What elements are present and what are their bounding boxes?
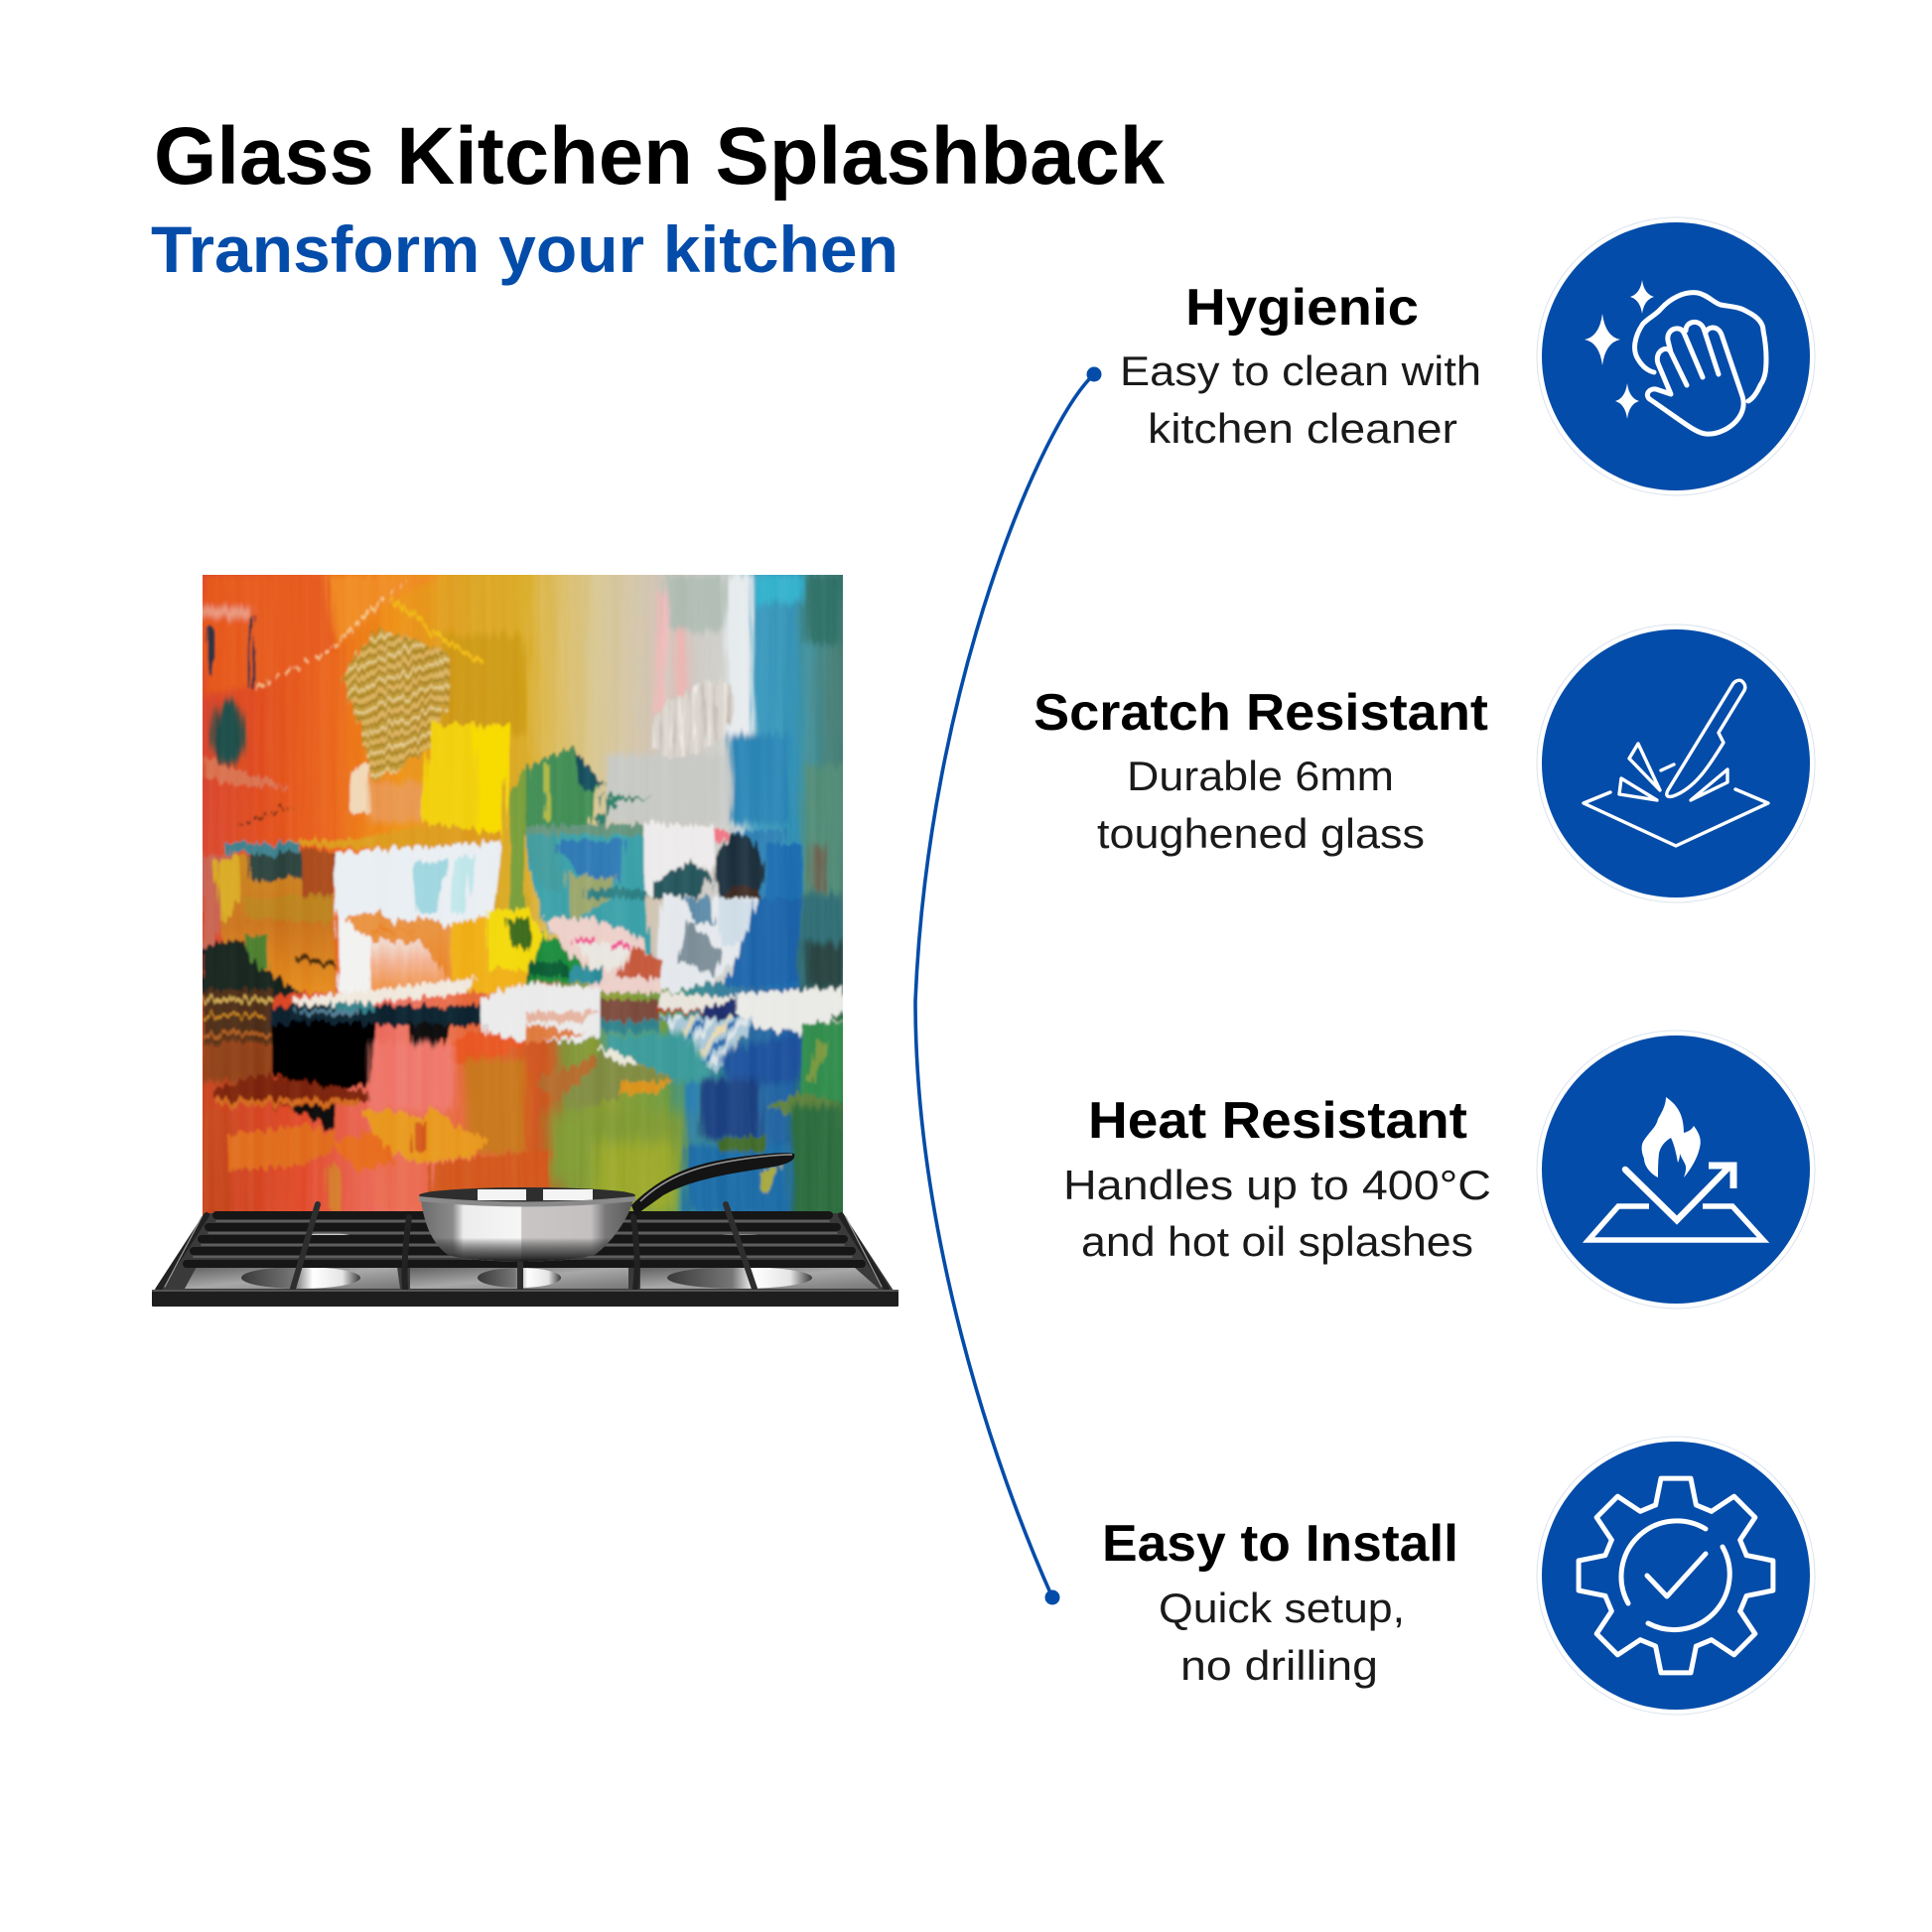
green splash xyxy=(508,748,649,923)
feature: hygienic text: Easy to clean with xyxy=(1120,347,1481,394)
feature: hygienic text xyxy=(1120,279,1481,452)
feature: hygienic text: Hygienic xyxy=(1185,279,1419,337)
feature: scratch resistant text xyxy=(1034,684,1488,857)
feature: heat resistant text: Heat Resistant xyxy=(1088,1092,1467,1150)
feature: scratch resistant text: toughened glass xyxy=(1097,810,1425,857)
dark teal smudge xyxy=(211,701,245,764)
striped reflection fan xyxy=(662,1016,755,1072)
feature: scratch resistant text: Scratch Resistant xyxy=(1034,684,1488,742)
feature: heat resistant text: Handles up to 400°C xyxy=(1063,1162,1491,1208)
feature: hygienic text: kitchen cleaner xyxy=(1148,405,1457,452)
frying pan xyxy=(419,1153,794,1261)
horizontal paint band xyxy=(203,978,843,1134)
icon: hand wiping with sparkles xyxy=(1537,217,1815,495)
burners xyxy=(241,1233,812,1289)
connector curve xyxy=(915,367,1102,1604)
gas hob cooktop xyxy=(152,1204,898,1307)
feature: easy to install text xyxy=(1102,1515,1458,1689)
pan handle xyxy=(631,1153,794,1215)
icon: flame over heat-reflecting glass xyxy=(1537,1031,1815,1309)
pale fan stroke xyxy=(651,679,735,759)
pan rim xyxy=(419,1187,635,1203)
connector dot top xyxy=(1086,367,1102,381)
feature: heat resistant text xyxy=(1063,1092,1491,1265)
white wash of left bowl xyxy=(335,842,501,933)
lower brush work xyxy=(203,1023,843,1219)
feature: easy to install text: Easy to Install xyxy=(1102,1515,1458,1573)
paint texture overlay xyxy=(203,575,843,1220)
right bowl xyxy=(486,822,802,993)
hob steel windows xyxy=(185,1267,879,1289)
hob surface xyxy=(154,1213,894,1291)
grate bars xyxy=(159,1215,887,1289)
left bowl xyxy=(203,843,336,1003)
icon: gear with check mark xyxy=(1537,1437,1815,1715)
pan body xyxy=(421,1199,633,1261)
ochre hatched brush block xyxy=(341,627,450,782)
feature: easy to install text: Quick setup, xyxy=(1159,1585,1405,1631)
connector dot bottom xyxy=(1044,1590,1060,1604)
icon: knife scratching glass xyxy=(1537,624,1815,902)
feature: easy to install text: no drilling xyxy=(1180,1642,1378,1689)
feature: heat resistant text: and hot oil splashes xyxy=(1081,1218,1473,1265)
title: Glass Kitchen Splashback xyxy=(154,111,1165,202)
front bar xyxy=(152,1290,898,1307)
grate fingers xyxy=(293,1204,755,1289)
feature: scratch resistant text: Durable 6mm xyxy=(1127,753,1394,799)
yellow brush block xyxy=(420,723,508,842)
panel: abstract painted glass splashback xyxy=(184,561,864,1231)
subtitle: Transform your kitchen xyxy=(151,212,898,286)
